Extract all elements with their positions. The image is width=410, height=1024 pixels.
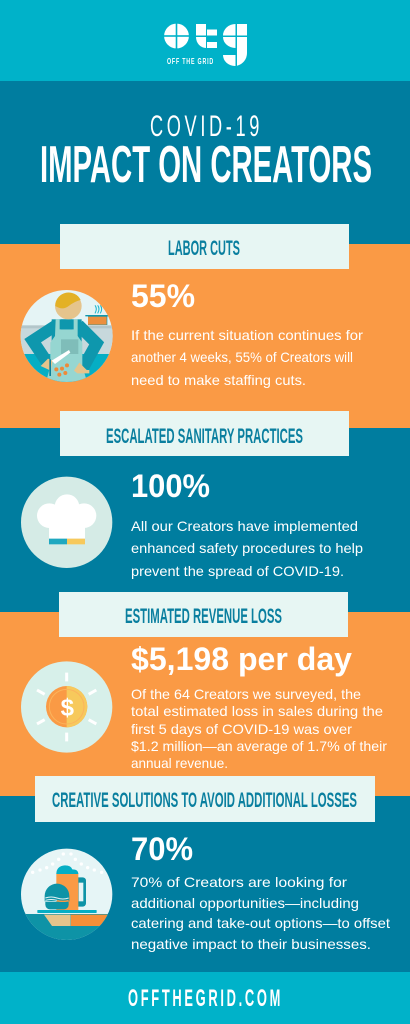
text: labor cuts: another 4 weeks, 55% of Creators will (131, 349, 353, 365)
header band with logo (0, 0, 410, 81)
icon: chef cutting vegetables (20, 290, 113, 382)
text: revenue loss: Of the 64 Creators we surveyed, the (131, 686, 361, 702)
heading: labor cuts (60, 224, 349, 269)
text: sanitary practices (131, 518, 363, 579)
text: labor cuts (131, 327, 363, 388)
icon: chef hat (21, 477, 112, 568)
icon: dollar coin: $ (61, 694, 74, 721)
heading: creative solutions (35, 776, 375, 822)
text: labor cuts: need to make staffing cuts. (131, 372, 306, 388)
stat: 55%: 55% (131, 278, 195, 314)
heading: escalated sanitary practices (60, 411, 349, 456)
text: creative solutions: additional opportunities—including (131, 895, 359, 911)
text: revenue loss (131, 686, 387, 771)
stat: $5,198 per day: $5,198 per day (131, 641, 352, 677)
footer band: OFFTHEGRID.COM (128, 985, 283, 1012)
title (40, 110, 372, 194)
heading: estimated revenue loss (59, 592, 348, 637)
heading: estimated revenue loss: ESTIMATED REVENUE LOSS (125, 605, 282, 628)
logo tagline: OFF THE GRID (167, 57, 214, 66)
footer band (0, 972, 410, 1024)
stat: 100%: 100% (131, 468, 210, 504)
stat: 70%: 70% (131, 831, 193, 867)
text: creative solutions: catering and take-out options—to offset (131, 915, 390, 931)
text: creative solutions (131, 874, 390, 952)
heading: labor cuts: LABOR CUTS (168, 237, 240, 260)
text: revenue loss: $1.2 million—an average of 1.7% of their (131, 738, 387, 754)
text: labor cuts: If the current situation continues for (131, 327, 363, 343)
icon: dollar coin (21, 661, 112, 753)
text: sanitary practices: enhanced safety procedures to help (131, 540, 363, 556)
icon: burger and drink on tray (21, 848, 112, 940)
text: revenue loss: total estimated loss in sales during the (131, 703, 383, 719)
text: sanitary practices: prevent the spread of COVID-19. (131, 563, 344, 579)
text: revenue loss: first 5 days of COVID-19 was over (131, 721, 352, 737)
text: sanitary practices: All our Creators have implemented (131, 518, 358, 534)
text: revenue loss: annual revenue. (131, 755, 228, 771)
logo: OTG (163, 22, 247, 66)
title: COVID-19 (150, 110, 263, 143)
text: creative solutions: negative impact to their businesses. (131, 936, 371, 952)
text: creative solutions: 70% of Creators are looking for (131, 874, 347, 890)
